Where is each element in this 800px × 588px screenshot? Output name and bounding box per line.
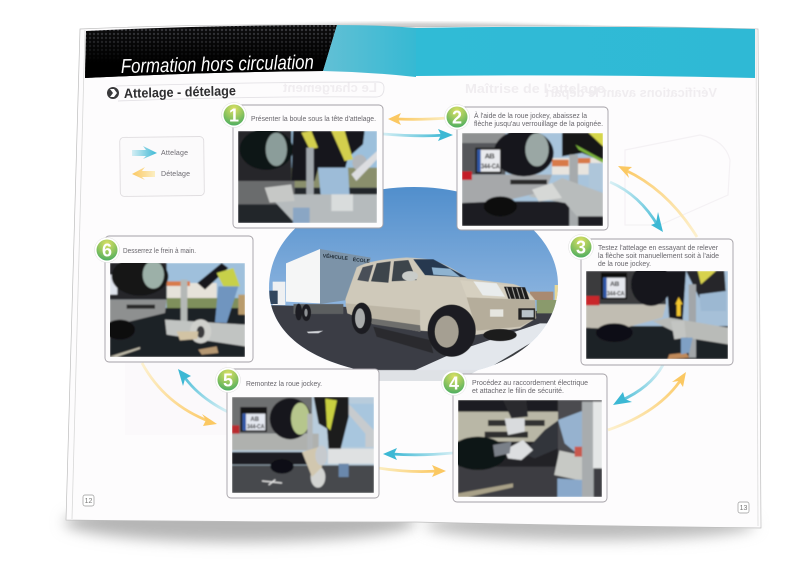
arrows between steps (142, 113, 697, 477)
photo 3: 344-CA (607, 290, 624, 297)
label: attelage: Attelage (161, 150, 188, 157)
caption 4: Procédez au raccordement électrique (472, 380, 588, 387)
wheels (352, 303, 372, 334)
arrow: attelage legend (132, 146, 157, 159)
photo 5: AB (250, 417, 260, 423)
photo 3 (586, 271, 728, 359)
step (371, 318, 421, 332)
book shadow (64, 22, 755, 542)
page number 12: 12 (85, 498, 92, 505)
badge 2: 2 (452, 108, 462, 128)
central photo: car and trailer: VÉHICULE (322, 251, 349, 262)
badge 5: 5 (223, 370, 233, 390)
arrow: detelage 5 to 4 (378, 465, 446, 477)
ground (271, 305, 552, 370)
photo 2: AB (485, 151, 495, 160)
caption 3: Testez l'attelage en essayant de relever (598, 245, 719, 252)
label: detelage: Dételage (161, 171, 190, 178)
header band (85, 25, 755, 78)
title: Formation hors circulation (121, 52, 314, 78)
arrow: attelage 3 to 4 (613, 365, 663, 405)
caption 1: Présenter la boule sous la tête d'attelage. (251, 116, 376, 123)
icon: bullet arrow (107, 87, 119, 99)
distant trailer (273, 282, 285, 305)
central photo: car and trailer (269, 187, 558, 381)
arrow: detelage 4 to 3 (608, 372, 686, 430)
panel: step 2 (444, 104, 608, 230)
legend box (120, 137, 204, 196)
ghost text showing through the paper: Le chargement (282, 80, 377, 95)
heading text: Attelage - dételage (124, 83, 236, 101)
badge 6 (94, 238, 120, 262)
panel: step 5 (216, 368, 379, 498)
caption 2: flèche jusqu'au verrouillage de la poignée. (474, 121, 603, 128)
arrow: detelage 3 to 2 (618, 166, 697, 237)
windows (357, 265, 373, 282)
ghost text showing through the paper: Vérifications avant le départ (544, 85, 717, 100)
caption 2: À l'aide de la roue jockey, abaissez la (474, 111, 587, 120)
arrow: detelage 6 to 5 (142, 363, 217, 426)
ghost text showing through the paper: Maîtrise de l'attelage (465, 81, 605, 96)
arrow: detelage legend (132, 167, 155, 180)
badge 5 (216, 368, 240, 392)
booklet pages (66, 25, 761, 528)
badge 3 (568, 234, 594, 260)
panel: step 6 (94, 236, 253, 362)
arrow: attelage 5 to 6 (178, 369, 228, 412)
photo 5 (232, 397, 374, 493)
badge 3: 3 (576, 238, 586, 258)
photo 1 (238, 131, 377, 223)
ghost text showing through the paper (125, 80, 730, 435)
caption 3: la flèche soit manuellement soit à l'aide (598, 253, 719, 260)
caption 5: Remontez la roue jockey. (246, 381, 322, 388)
teal band left page (323, 25, 416, 77)
photo 2 (462, 133, 603, 226)
photo 4 (458, 400, 602, 497)
trailer (286, 249, 320, 303)
section heading (107, 82, 384, 101)
badge 4: 4 (449, 374, 459, 394)
page number 12 (83, 495, 94, 506)
page number 13 (738, 502, 749, 513)
panel: step 1 (222, 102, 383, 228)
teal band right page (416, 27, 755, 78)
central photo: car and trailer: ÉCOLE (352, 255, 371, 265)
page number 13: 13 (740, 505, 747, 512)
badge 2 (444, 104, 470, 130)
caption 3: de la roue jockey. (598, 261, 651, 268)
panel: step 4 (442, 370, 607, 502)
arrow: detelage 2 to 1 (388, 113, 447, 125)
badge 1 (222, 102, 246, 128)
photo 6 (110, 263, 245, 357)
panel: step 3 (568, 234, 733, 365)
black title banner (85, 25, 337, 78)
badge 4 (442, 370, 466, 396)
car body (345, 258, 536, 335)
photo 3: AB (610, 281, 620, 288)
caption 4: et attachez le filin de sécurité. (472, 388, 564, 395)
photo 2: 344-CA (481, 161, 500, 170)
photo 5: 344-CA (247, 425, 265, 431)
grille, lights (504, 287, 529, 299)
badge 1: 1 (229, 106, 239, 126)
shadows on ground (373, 327, 433, 353)
arrow: attelage 1 to 2 (383, 129, 453, 141)
caption 6: Desserrez le frein à main. (123, 248, 196, 255)
arrow: attelage 2 to 3 (610, 182, 663, 232)
badge 6: 6 (102, 240, 112, 260)
arrow: attelage 4 to 5 (383, 448, 453, 460)
